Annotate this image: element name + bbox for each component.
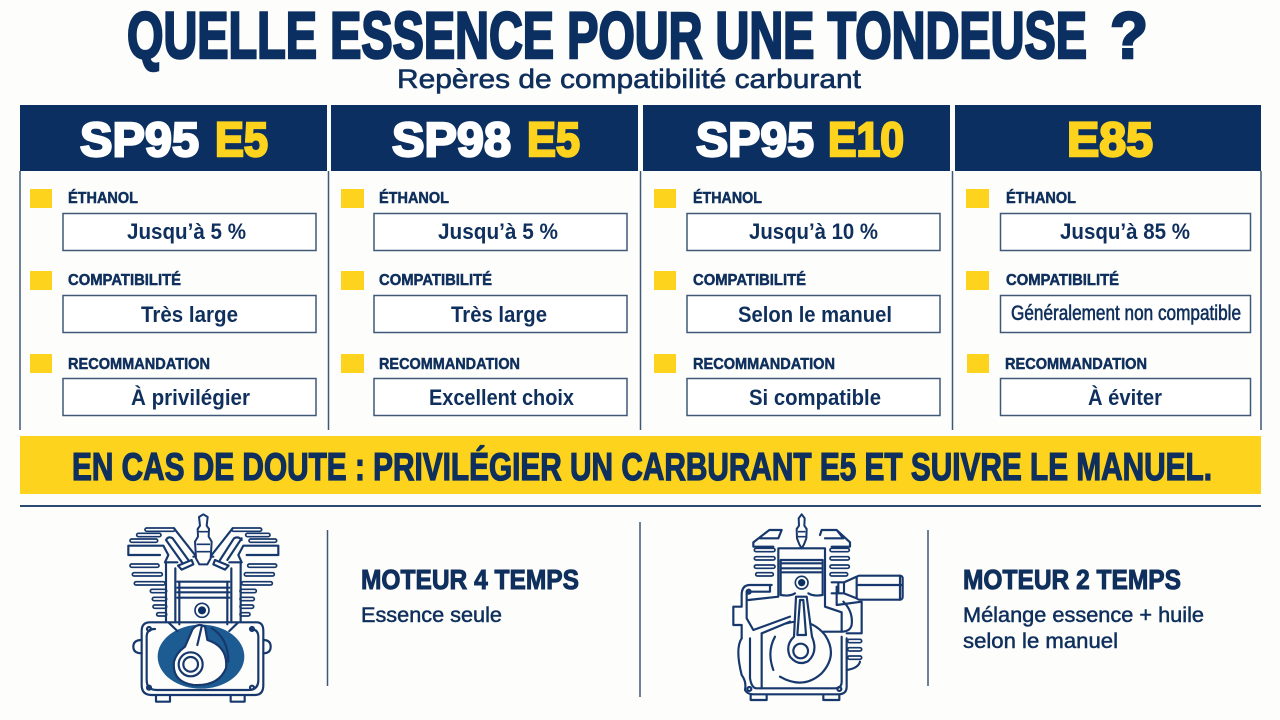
panel: SP98 E5: Jusqu’à 5 %: [438, 219, 558, 244]
heading: SP95 E5: SP95: [80, 114, 199, 167]
panel: SP95 E5: ÉTHANOL: [68, 188, 138, 207]
panel: SP95 E5: [20, 105, 328, 430]
title: ?: [1110, 0, 1148, 72]
panel: E85: RECOMMANDATION: [1005, 356, 1147, 373]
heading: SP95 E5: [80, 114, 268, 167]
subtitle: Repères de compatibilité carburant: [397, 64, 862, 94]
panel: SP95 E5: À privilégier: [131, 385, 250, 410]
label: moteur 2 temps: MOTEUR 2 TEMPS: [963, 564, 1181, 595]
panel: SP95 E10: Jusqu’à 10 %: [749, 219, 878, 244]
icon: two-stroke engine: [733, 514, 903, 700]
panel: SP98 E5: COMPATIBILITÉ: [379, 270, 492, 289]
panel: SP98 E5: RECOMMANDATION: [379, 356, 520, 373]
panel: E85: [955, 105, 1261, 430]
text: essence seule: Essence seule: [361, 604, 502, 627]
text: mélange essence + huile: Mélange essence + huile: [963, 604, 1204, 627]
heading: SP95 E5: E5: [215, 114, 268, 167]
panel: SP98 E5: [331, 105, 640, 430]
text: mélange essence + huile: selon le manuel: [963, 630, 1118, 653]
heading: SP95 E10: SP95: [696, 114, 814, 167]
panel: SP95 E10: Selon le manuel: [738, 302, 892, 327]
heading: SP95 E10: [696, 114, 904, 167]
heading: SP95 E10: E10: [828, 114, 904, 167]
heading: SP98 E5: [392, 114, 580, 167]
label: moteur 4 temps: MOTEUR 4 TEMPS: [361, 564, 579, 595]
heading: SP98 E5: E5: [527, 114, 580, 167]
panel: SP95 E10: ÉTHANOL: [693, 188, 762, 207]
panel: SP95 E5: COMPATIBILITÉ: [68, 270, 181, 289]
panel: E85: COMPATIBILITÉ: [1006, 270, 1119, 289]
heading: SP98 E5: SP98: [392, 114, 511, 167]
panel: E85: ÉTHANOL: [1006, 188, 1076, 207]
panel: SP95 E10: COMPATIBILITÉ: [693, 270, 806, 289]
panel: E85: Jusqu’à 85 %: [1060, 219, 1190, 244]
panel: SP95 E10: RECOMMANDATION: [693, 356, 835, 373]
panel: SP98 E5: ÉTHANOL: [379, 188, 449, 207]
panel: SP95 E10: [643, 105, 952, 430]
panel: SP95 E5: Jusqu’à 5 %: [127, 219, 246, 244]
panel: SP95 E5: Très large: [141, 302, 238, 327]
icon: four-stroke engine: [128, 514, 278, 702]
panel: SP98 E5: Très large: [451, 302, 547, 327]
text: mélange essence + huile: [963, 604, 1204, 653]
panel: SP95 E10: Si compatible: [749, 385, 881, 410]
heading: E85: E85: [1067, 114, 1153, 167]
panel: SP98 E5: Excellent choix: [429, 385, 574, 410]
panel: E85: À éviter: [1088, 385, 1162, 410]
panel: SP95 E5: RECOMMANDATION: [68, 356, 210, 373]
